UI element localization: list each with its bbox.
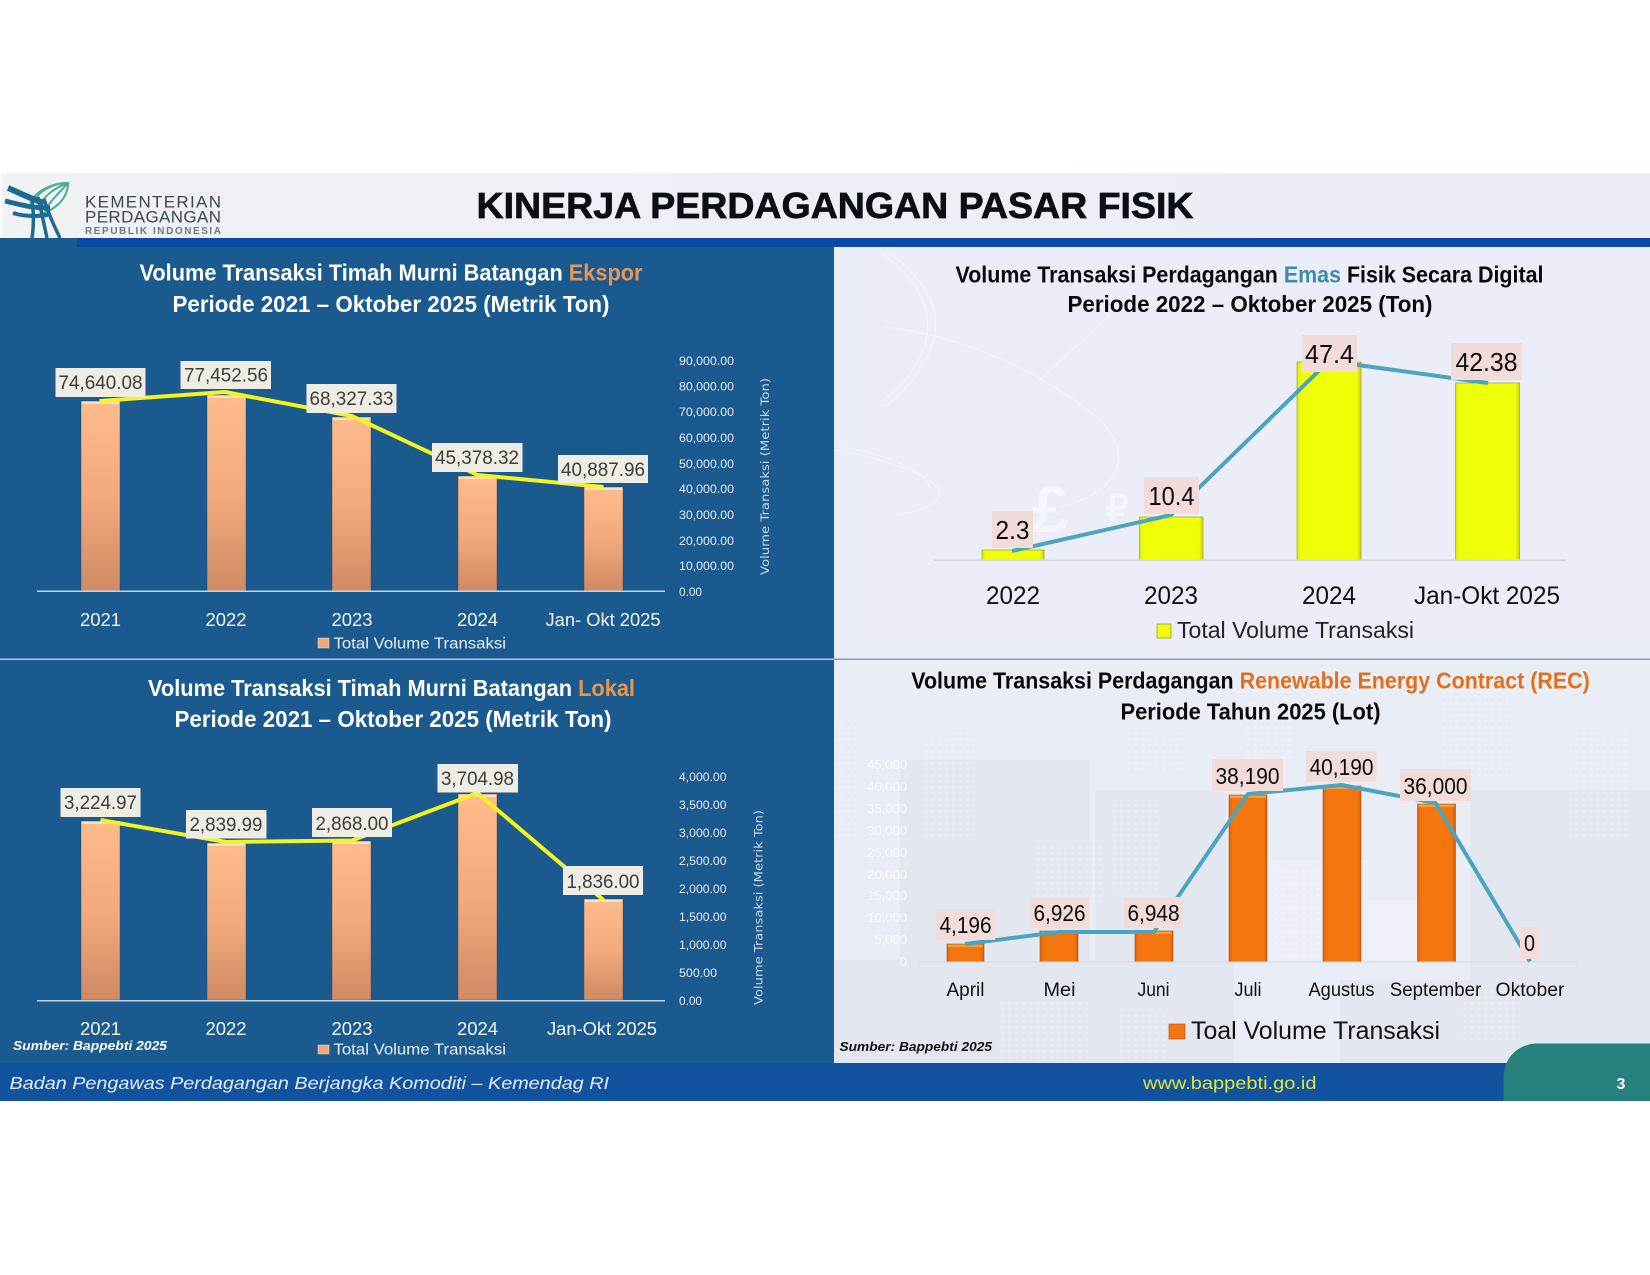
faint y axis: rec: 15,000 [867, 888, 907, 903]
faint y axis: rec: 20,000 [867, 867, 907, 882]
faint y axis: rec: 5,000 [874, 932, 907, 947]
y axis: timah lokal: 500.00 [679, 968, 717, 980]
bar chart: timah ekspor: 2023 [332, 609, 372, 630]
y axis: timah lokal: 3,500.00 [679, 800, 726, 812]
bar chart: timah lokal [37, 764, 665, 1039]
panel: timah ekspor [0, 238, 834, 659]
bar chart: timah lokal: Jan-Okt 2025 [547, 1018, 657, 1039]
bar chart: timah lokal: 2,868.00 [316, 814, 388, 835]
y axis: timah ekspor: 10,000.00 [679, 561, 734, 573]
bar chart: rec: September [1390, 980, 1482, 1001]
bar chart: emas: 47.4 [1305, 339, 1354, 369]
bar chart: timah lokal: 2022 [206, 1018, 246, 1039]
faint y axis: rec [867, 757, 907, 969]
legend: rec: Toal Volume Transaksi [1191, 1017, 1440, 1045]
bar chart: emas: 2.3 [996, 515, 1030, 545]
header band [0, 173, 1650, 247]
bar chart: rec: 36,000 [1404, 773, 1468, 799]
heading: timah ekspor: Periode 2021 – Oktober 2025 (Metrik Ton) [172, 291, 610, 317]
bar chart: emas: 2023 [1144, 582, 1198, 610]
bar chart: emas: 2024 [1302, 582, 1356, 610]
y axis: timah ekspor: 60,000.00 [679, 433, 734, 445]
y axis: timah ekspor: 30,000.00 [679, 510, 734, 522]
y axis: timah lokal: 0.00 [679, 996, 702, 1008]
y axis: timah ekspor: 20,000.00 [679, 536, 734, 548]
y axis: timah lokal: Volume Transaksi (Metrik Ton) [752, 810, 766, 1005]
y axis: timah ekspor: 50,000.00 [679, 459, 734, 471]
source note: rec: Sumber: Bappebti 2025 [840, 1039, 993, 1054]
bar chart: timah ekspor [37, 361, 665, 630]
bar chart: timah lokal: 2,839.99 [190, 815, 262, 836]
ministry logo: PERDAGANGAN [85, 208, 221, 226]
ministry logo: KEMENTERIAN [85, 192, 221, 212]
bar chart: rec: 4,196 [940, 912, 992, 938]
legend: emas: Total Volume Transaksi [1177, 617, 1414, 643]
bar chart: emas: 10.4 [1148, 481, 1194, 511]
bar chart: emas [934, 335, 1566, 610]
bar chart: rec: Juni [1138, 980, 1170, 1001]
bar chart: rec: Oktober [1496, 980, 1565, 1001]
heading: timah ekspor: Volume Transaksi Timah Murni Batangan Ekspor [140, 260, 643, 286]
bar chart: rec: April [946, 980, 984, 1001]
bar chart: timah ekspor: 2022 [206, 609, 246, 630]
bar chart: timah lokal: 1,836.00 [566, 872, 640, 893]
legend: timah ekspor: Total Volume Transaksi [334, 636, 506, 652]
bar chart: emas: 2022 [986, 582, 1040, 610]
y axis: timah lokal: 1,500.00 [679, 912, 726, 924]
heading: rec [911, 668, 1590, 724]
heading: timah lokal: Volume Transaksi Timah Murni Batangan Lokal [148, 675, 635, 701]
bar chart: timah lokal: 2024 [457, 1018, 498, 1039]
bar chart: timah ekspor: 68,327.33 [310, 389, 394, 410]
bar chart: emas: Jan-Okt 2025 [1414, 582, 1560, 610]
bar chart: rec: Juli [1234, 980, 1262, 1001]
heading: timah lokal [148, 675, 635, 732]
bar chart: rec: 6,948 [1128, 900, 1180, 926]
heading: emas: Volume Transaksi Perdagangan Emas Fisik Secara Digital [956, 262, 1544, 288]
heading: emas [956, 262, 1544, 317]
bar chart: rec [919, 751, 1577, 1001]
bar chart: timah ekspor: 74,640.08 [58, 373, 142, 394]
faint y axis: rec: 30,000 [867, 823, 907, 838]
bar chart: rec: 40,190 [1310, 754, 1374, 780]
bar chart: rec: 6,926 [1034, 900, 1086, 926]
footer website: www.bappebti.go.id [1142, 1073, 1316, 1093]
panel: emas: ₽ [1106, 487, 1129, 528]
y axis: timah lokal: 4,000.00 [679, 772, 726, 784]
panel: emas [834, 247, 1650, 659]
ministry logo [5, 183, 221, 238]
bar chart: timah ekspor: 40,887.96 [561, 460, 645, 481]
source note: timah lokal: Sumber: Bappebti 2025 [13, 1038, 168, 1053]
faint y axis: rec: 25,000 [867, 845, 907, 860]
panel: timah lokal [0, 660, 834, 1063]
y axis: timah ekspor: 80,000.00 [679, 382, 734, 394]
panel: emas: £ [1032, 472, 1069, 546]
ministry logo: REPUBLIK INDONESIA [85, 226, 221, 237]
y axis: timah ekspor: Volume Transaksi (Metrik Ton) [758, 378, 772, 575]
bar chart: timah ekspor: Jan- Okt 2025 [546, 609, 660, 630]
y axis: timah ekspor: 0.00 [679, 587, 702, 599]
faint y axis: rec: 45,000 [867, 757, 907, 772]
bar chart: timah lokal: 3,704.98 [441, 769, 514, 790]
heading: emas: Periode 2022 – Oktober 2025 (Ton) [1068, 291, 1432, 317]
bar chart: timah lokal: 2023 [332, 1018, 372, 1039]
faint y axis: rec: 35,000 [867, 801, 907, 816]
faint y axis: rec: 0 [900, 954, 907, 969]
heading: timah lokal: Periode 2021 – Oktober 2025 (Metrik Ton) [174, 706, 612, 732]
y axis: timah ekspor: 70,000.00 [679, 407, 734, 419]
y axis: timah lokal [679, 772, 766, 1008]
heading: timah ekspor [140, 260, 643, 317]
faint y axis: rec: 40,000 [867, 779, 907, 794]
y axis: timah lokal: 1,000.00 [679, 940, 726, 952]
footer bar [0, 1044, 1650, 1101]
y axis: timah lokal: 2,500.00 [679, 856, 726, 868]
heading: rec: Periode Tahun 2025 (Lot) [1120, 698, 1380, 724]
footer organisation: Badan Pengawas Perdagangan Berjangka Komoditi – Kemendag RI [10, 1073, 609, 1093]
y axis: timah ekspor: 90,000.00 [679, 356, 734, 368]
bar chart: emas: 42.38 [1456, 347, 1518, 377]
y axis: timah lokal: 3,000.00 [679, 828, 726, 840]
heading: rec: Volume Transaksi Perdagangan Renewable Energy Contract (REC) [911, 668, 1590, 694]
bar chart: timah ekspor: 45,378.32 [435, 448, 519, 469]
y axis: timah ekspor: 40,000.00 [679, 484, 734, 496]
bar chart: rec: 38,190 [1216, 763, 1280, 789]
bar chart: timah lokal: 3,224.97 [64, 793, 137, 814]
legend: timah lokal: Total Volume Transaksi [334, 1042, 506, 1058]
main title: KINERJA PERDAGANGAN PASAR FISIK [476, 185, 1194, 226]
page number tab [1504, 1044, 1650, 1101]
bar chart: timah ekspor: 77,452.56 [184, 366, 268, 386]
bar chart: timah ekspor: 2024 [457, 609, 498, 630]
bar chart: rec: Agustus [1308, 980, 1374, 1001]
bar chart: timah lokal: 2021 [80, 1018, 121, 1039]
panel: renewable energy contract [834, 660, 1650, 1063]
page number tab: 3 [1617, 1076, 1626, 1093]
y axis: timah ekspor [679, 356, 772, 599]
bar chart: rec: 0 [1524, 930, 1535, 956]
bar chart: timah ekspor: 2021 [80, 609, 121, 630]
y axis: timah lokal: 2,000.00 [679, 884, 726, 896]
bar chart: rec: Mei [1044, 980, 1076, 1001]
faint y axis: rec: 10,000 [867, 910, 907, 925]
